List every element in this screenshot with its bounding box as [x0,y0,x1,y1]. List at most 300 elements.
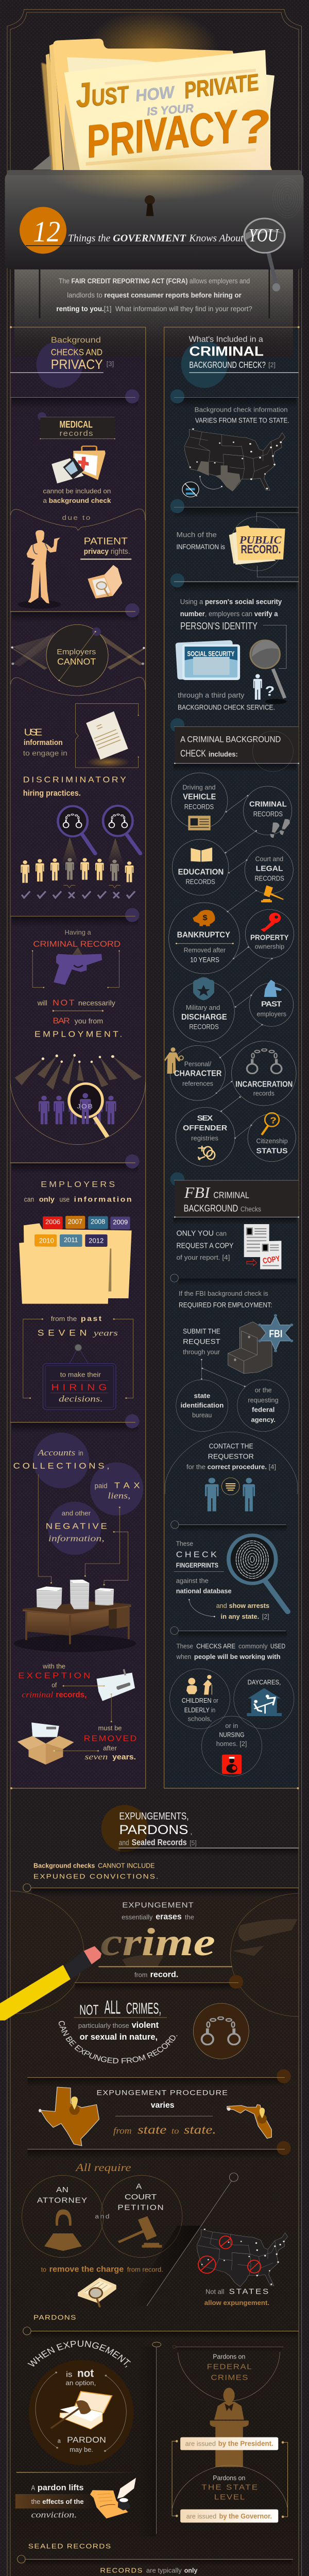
text: patient privacy rights: PATIENT [84,536,128,547]
text: will not necessarily bar you from employment: necessarily [78,999,115,1007]
icon: medical bag and x-ray [52,446,106,483]
text: with the exception of criminal records [18,1663,90,1699]
text: background checks cannot include expunged convictions: Background checks [33,1862,95,1870]
text: not all states allow expungement: Not all [205,2289,224,2296]
bubble: bankruptcy: $ [202,914,208,922]
text: show arrests in any state [188,1599,269,1621]
bubble: or in nursing homes: NURSING [219,1732,244,1739]
sub-heading: a criminal background check includes: A CRIMINAL BACKGROUND [180,735,281,744]
bubble: an attorney: ATTORNEY [37,2197,88,2205]
text: employers can only use information: use [60,1196,70,1204]
heading: expungements, pardons and sealed records: , [190,1828,193,1836]
keyhole [145,195,155,216]
year tabs 2006 to 2012: 2008 [91,1218,105,1226]
bubble: requesting federal agency: agency. [251,1416,276,1424]
text: not all crimes can be expunged from record: ALL [105,1997,121,2018]
callout: employers cannot: CANNOT [57,656,96,667]
icon: report copy: COPY [262,1255,281,1265]
text: from the past seven years [23,1315,133,1399]
people silhouettes [39,1096,116,1124]
vertical divider [138,2342,161,2536]
bubble: criminal records: CRIMINAL [249,801,287,808]
icon: magnifier and small person [250,640,287,704]
sign: hiring decisions: to make their [60,1371,101,1379]
divider two [10,603,140,622]
bubble: bankruptcy: 10 YEARS [190,956,219,964]
heading: sealed records: SEALED RECORDS [28,2543,111,2550]
text: records are typically only sealed for juveniles: only [184,2567,197,2574]
label: issued by the governor: are issued [186,2513,216,2520]
text: a pardon lifts the effects of the conviction [15,2482,94,2519]
divider four [10,1155,140,1174]
bubble: bankruptcy [169,903,239,974]
divider [170,1626,287,1638]
text: social security number verifies identity: number, employers can verify a [180,610,278,618]
magnifying glass: you [244,218,285,292]
bubble: education records: RECORDS [185,878,215,886]
text: not all states allow expungement: allow expungement. [204,2299,269,2307]
text: with the exception of criminal records: with the [42,1663,65,1670]
callout: employers cannot [46,624,108,686]
text: must be removed after seven years: after [103,1744,117,1752]
state level pardons: THE STATE [201,2483,258,2492]
label: issued by the governor [180,2510,278,2522]
state level pardons: Pardons on [213,2475,245,2482]
left column background [10,327,146,1788]
bubble: daycares: DAYCARES, [248,1679,281,1686]
text: show arrests in any state: [2] [262,1613,269,1620]
smudge marks [122,1919,298,1967]
text: social security number verifies identity: Using a person's social security [180,598,282,606]
bubble: children or elderly in schools: CHILDREN or [182,1697,218,1705]
sub-heading: a criminal background check includes: includes: [209,750,238,758]
text: not all crimes can be expunged from record: CRIMES, [126,1999,161,2017]
text: employers can only use information: only [39,1196,55,1204]
bubble: bankruptcy: Removed after [184,947,226,954]
icon: book and gavel [51,2392,112,2429]
heading: expungements, pardons and sealed records: PARDONS [119,1822,188,1837]
text: expungement essentially erases the crime from record: record. [150,1969,178,1979]
text: to remove the charge from record [41,2264,163,2274]
text: through a third party background check service: BACKGROUND CHECK SERVICE. [178,704,275,711]
divider [170,1274,297,1285]
bubble: military and discharge records: Military and [186,1004,220,1012]
icon: public record folder: PUBLIC [239,534,282,546]
spotlights [15,1054,142,1090]
diagonal divider with map [128,2173,288,2306]
year tabs 2006 to 2012: 2010 [39,1238,54,1245]
text: if required for employment: If the FBI background check is [179,1290,268,1298]
banner: due to: due to [62,514,90,522]
text: where checks are used: CHECKS ARE [196,1642,235,1650]
icon: pencil eraser [0,1946,101,2021]
medical records label [38,412,115,439]
bubble: citizenship status: ? [270,1115,277,1126]
bubble: sex offender registries: SEX [197,1114,213,1123]
text: must be removed after seven years [84,1725,136,1761]
glow behind folder [85,10,219,88]
podium area: pardons on federal crimes [172,2345,288,2522]
text: expungement procedure varies from state to state: state. [184,2123,216,2137]
text: with the exception of criminal records: EXCEPTION [18,1670,90,1680]
divider one [10,389,140,408]
text: all require: All require [75,2161,131,2174]
text: from the past seven years: past [81,1315,101,1323]
bubble: state identification bureau: identification [181,1402,224,1410]
text: use information to engage in: information [24,739,63,747]
text: not all crimes can be expunged from record: particularly those [78,2022,129,2030]
text: and: and [95,2213,109,2220]
icon: cardboard box [18,1722,99,1765]
bubble: requesting federal agency: requesting [248,1397,279,1404]
bubble: citizenship status [248,1113,296,1162]
magnifier on job candidate: JOB [77,1103,93,1110]
bubble: or in nursing homes: homes. [2] [216,1740,247,1748]
text: a pardon lifts the effects of the conviction: effects of the [42,2498,84,2506]
bubble: bankruptcy: BANKRUPTCY [177,930,230,939]
bubble: sex offender registries: registries [191,1134,218,1142]
bubble: character references: Personal/ [184,1060,211,1068]
text: patient privacy rights: privacy rights. [84,548,130,556]
bubble: driving and vehicle records: Driving and [182,784,216,791]
text: submit the request through your: REQUEST [183,1337,220,1346]
arc: contact the requestor: CONTACT THE [209,1443,253,1450]
text: having a criminal record [33,929,121,948]
bubble: a court petition: PETITION [117,2204,164,2212]
text: expungement procedure varies from state to state: varies [151,2100,175,2110]
text: show arrests in any state: in any state. [221,1613,259,1621]
intro panel side bars [39,269,270,318]
text: with the exception of criminal records: records, [56,1690,87,1699]
bubble: children or elderly in schools: schools, [188,1716,212,1722]
magnifying glass: you: YOU [249,225,280,246]
heading: expungements, pardons and sealed records: and [119,1839,129,1847]
text: with the exception of criminal records: criminal [22,1690,54,1699]
text: expungement essentially erases the crime from record: essentially [122,1914,153,1921]
text: much of the information [176,531,225,551]
text: must be removed after seven years: must be [98,1725,122,1732]
text: and other negative information [46,1510,107,1544]
icon: public record folder [229,513,299,577]
sign: hiring decisions: HIRING [51,1382,107,1393]
text: paid tax liens: liens, [108,1490,130,1501]
heading: background checks and privacy: Background [51,336,101,345]
text: expungement essentially erases the crime from record: the [185,1914,194,1921]
bubble: or in nursing homes: or in [225,1722,238,1730]
medical records label: MEDICAL [60,419,93,430]
bubble: property ownership [245,909,294,958]
illustration: doctor silhouette [18,530,61,609]
drawer divider line [26,245,247,246]
text: where checks are used: USED [270,1642,285,1650]
text: having a criminal record: Having a [65,929,91,937]
map: Texas [39,2087,99,2146]
divider [18,2555,293,2566]
arc: contact the requestor: REQUESTOR [208,1453,254,1461]
bubble: sex offender registries: OFFENDER [183,1124,228,1132]
text: use information to engage in: to engage in [23,750,67,757]
sub-heading: a criminal background check includes [170,718,299,772]
bubble: requesting federal agency: or the [255,1387,272,1394]
drawer front [5,144,304,269]
icon: filing cabinet and FBI star badge: FBI [269,1328,282,1340]
bubble: character references: references [182,1080,213,1088]
text: records are typically only sealed for juveniles [100,2567,197,2576]
text: accounts in collections: in [78,1449,83,1458]
icon: filing cabinet and FBI star badge [228,1314,293,1374]
sign: hiring decisions: decisions. [59,1394,103,1403]
bubble: education records [172,839,229,895]
state level pardons [172,2465,287,2522]
drawer subtitle: Knows About [188,232,244,244]
text: will not necessarily bar you from employment: will [37,999,47,1007]
drawer subtitle: GOVERNMENT [113,232,186,244]
heading: FBI criminal background checks: FBI [184,1184,211,1201]
text: accounts in collections: COLLECTIONS, [13,1461,109,1470]
text: accounts in collections: Accounts [37,1448,75,1458]
divider [170,499,299,518]
bubble: education records: EDUCATION [178,868,224,876]
illustration: folder with year tabs [19,1216,132,1304]
illustration: spotlights on job candidates [10,1054,145,1145]
text: much of the information: INFORMATION is [176,543,225,551]
text: not all crimes can be expunged from record: or sexual in nature, [80,2032,158,2042]
text: expungement procedure varies from state to state: from [113,2126,132,2136]
text and circle: when expungement is not an option: is [66,2370,73,2379]
text: background checks cannot include expunged convictions: CANNOT INCLUDE [98,1862,154,1870]
text: a pardon lifts the effects of the conviction: A [31,2484,36,2492]
text and circle: when expungement is not an option: PARDON [67,2436,106,2445]
bubble: state identification bureau [176,1359,246,1432]
bubble: court and legal records: Court and [255,856,283,863]
bubble: a court petition [101,2175,182,2258]
expungement section background [10,1788,299,2576]
text: not all crimes can be expunged from record: violent [132,2020,159,2030]
bubble: sex offender registries [176,1107,235,1166]
bubble: a court petition: COURT [125,2193,157,2201]
bubble: past employers [249,980,294,1026]
divider [27,2069,291,2087]
text: not all crimes can be expunged from record: NOT [79,2003,98,2018]
bubble: children or elderly in schools [169,1669,230,1729]
text: will not necessarily bar you from employment [35,999,122,1039]
text: background checks cannot include expunged convictions [33,1862,158,1880]
text: submit the request through your [183,1327,220,1356]
text: expungement procedure varies from state to state [96,2089,228,2137]
text: these check fingerprints: These [176,1540,193,1548]
text: paid tax liens: TAX [114,1480,140,1490]
bubble: citizenship status: Citizenship [256,1138,288,1145]
connector lines between bubbles [216,795,273,1139]
bubble: court and legal records: LEGAL [256,865,283,873]
bubble: an attorney: AN [56,2186,68,2194]
heading: FBI criminal background checks [170,1172,299,1225]
icon: scroll, quill and ink [90,2478,136,2518]
text: submit the request through your: SUBMIT THE [183,1327,220,1335]
year tabs 2006 to 2012: 2011 [64,1236,78,1244]
heading: background checks and privacy: CHECKS AND [51,347,102,358]
year tabs 2006 to 2012 [35,1216,130,1247]
bubble: state identification bureau: bureau [192,1412,212,1419]
text: varies from state to state: Background check information [195,406,288,414]
banner: due to [11,509,145,530]
bubble: military and discharge records: RECORDS [189,1023,219,1031]
text: must be removed after seven years: REMOVED [84,1734,136,1743]
callout: employers cannot: Employers [57,648,96,656]
bubble: court and legal records [245,846,293,902]
candidate row [21,858,133,883]
text: will not necessarily bar you from employment: NOT [53,999,75,1007]
folder back layers [32,44,63,172]
folder [53,39,272,170]
text: submit the request through your: through your [183,1348,220,1356]
icon: social security card: SOCIAL SECURITY [187,650,234,658]
paper stacks [37,1580,114,1609]
text: social security number verifies identity: PERSON'S IDENTITY [180,621,258,632]
bubble cluster: collections, tax liens, negative information [13,1433,143,1555]
text and circle: when expungement is not an option [27,2340,134,2465]
text: these check fingerprints: FINGERPRINTS [176,1562,218,1569]
bubble: driving and vehicle records [171,773,228,831]
sign: hiring decisions [43,1344,116,1410]
sub-heading: a criminal background check includes: CHECK [180,749,206,759]
text: to remove the charge from record: to [41,2266,46,2274]
text and circle: when expungement is not an option: not [77,2367,94,2379]
map: states without expungement [197,2228,288,2286]
text: through a third party background check service [178,691,275,711]
text: show arrests in any state: and [216,1602,227,1610]
text: paid tax liens: paid [95,1482,108,1490]
heading: criminal background check: [2] [268,362,276,368]
text: employers can only use information [24,1180,132,1204]
drawer subtitle [68,232,244,244]
icon: magnifier with fingerprint [229,1535,288,1612]
bubble: military and discharge records [174,977,234,1042]
text: cannot be included on a background check: cannot be included on [43,487,111,495]
illustration: desk with paper stacks [14,1580,136,1652]
text: varies from state to state [195,406,289,425]
bubble: character references [165,1045,225,1100]
icon: handgun in frame [32,947,120,988]
state level pardons: LEVEL [214,2494,245,2501]
text: will not necessarily bar you from employment: you from [75,1018,103,1025]
heading: expungements, pardons and sealed records: [5] [190,1840,197,1847]
text: where checks are used: commonly [238,1642,268,1650]
text: expungement procedure varies from state to state: to [171,2126,179,2136]
bubble: property ownership: PROPERTY [250,934,289,942]
text: where checks are used [176,1642,285,1661]
text: if required for employment: REQUIRED FOR EMPLOYMENT: [179,1301,272,1309]
text: through a third party background check service: through a third party [178,691,245,700]
year tabs 2006 to 2012: 2006 [45,1218,60,1226]
year tabs 2006 to 2012: 2012 [89,1238,104,1245]
text: expungement essentially erases the crime from record: from [134,1971,147,1979]
illustration: president at podium [210,2388,249,2467]
heading: pardons: PARDONS [33,2314,76,2321]
paper sheets [64,50,274,170]
text: where checks are used: people will be working with [194,1653,281,1661]
title word: is your: IS YOUR [146,103,195,118]
map: Florida [227,2105,271,2139]
text: discriminatory hiring practices: DISCRIMINATORY [23,775,126,784]
text: social security number verifies identity [180,598,286,668]
decorative corner arcs [10,1891,299,2016]
number twelve badge: 12 [33,216,60,248]
bubble: children or elderly in schools: ELDERLY in [184,1706,215,1714]
number twelve badge [20,207,66,253]
divider three [10,908,140,927]
bubble: daycares [234,1669,294,1729]
text: records are typically only sealed for juveniles: are typically [146,2567,182,2574]
text: from the past seven years: from the [51,1315,77,1323]
text: from the past seven years: SEVEN [38,1328,87,1337]
folder with title [32,39,274,172]
intro text: The FAIR CREDIT REPORTING ACT (FCRA) allows employers and [59,277,250,285]
intro text: landlords to request consumer reports before hiring or [67,291,242,299]
bubble: past employers: PAST [261,1000,282,1008]
divider [171,1521,287,1532]
text: not all states allow expungement: STATES [229,2287,268,2296]
text and circle: when expungement is not an option: may be. [70,2446,93,2454]
spotlight beams [11,632,145,670]
text: use information to engage in [23,727,67,757]
icon: public record folder: RECORD. [241,543,281,556]
text: a pardon lifts the effects of the conviction: pardon lifts [38,2482,84,2492]
text: where checks are used: These [176,1642,193,1650]
text: must be removed after seven years: years. [112,1753,136,1761]
text: employers can only use information: information [74,1196,132,1204]
intro text [56,277,252,313]
text: with the exception of criminal records: of [52,1682,57,1689]
bubble: court and legal records: RECORDS [254,874,284,883]
intro panel background [14,269,293,357]
text: pardons on federal crimes [207,2353,252,2382]
text: these check fingerprints [174,1540,232,1595]
label: issued by the governor: by the Governor. [219,2512,272,2520]
text: only you can request a copy: REQUEST A COPY [176,1242,234,1250]
magnifier with handcuffs [103,806,140,854]
icon: document in frame [76,704,139,768]
panel: background checks and privacy [10,336,145,1765]
heading: expungements, pardons and sealed records: EXPUNGEMENTS, [119,1811,189,1822]
divider [75,1975,243,1992]
text: accounts in collections [13,1448,109,1470]
banner curve [11,677,145,696]
icon: two people with speech bubble [165,1478,298,1512]
text: having a criminal record: CRIMINAL RECORD [33,940,121,948]
heading: background checks and privacy [10,336,114,388]
bubble: property ownership: ownership [255,943,284,951]
text: pardons on federal crimes: FEDERAL [207,2363,252,2371]
text: not all crimes can be expunged from record: CAN BE EXPUNGED FROM RECORD. [59,2021,177,2064]
heading: criminal background check [181,335,299,388]
drawer subtitle: Things the [68,232,111,244]
bubble: driving and vehicle records: RECORDS [184,803,214,811]
bubble: requesting federal agency [237,1380,289,1432]
bubble: an attorney [22,2175,104,2258]
heading: expungements, pardons and sealed records: Sealed Records [132,1838,187,1847]
intro text: renting to you.[1] What information will they find in your report? [56,305,252,313]
title [73,69,274,167]
bubble: past employers: employers [257,1010,286,1018]
icon: report copy [244,1224,281,1269]
text: will not necessarily bar you from employment: EMPLOYMENT. [35,1030,122,1039]
divider [23,1884,299,1897]
text: background checks cannot include expunged convictions: EXPUNGED CONVICTIONS. [33,1873,158,1880]
text: these check fingerprints: CHECK [176,1551,217,1559]
text: these check fingerprints: against the [176,1577,209,1585]
text and circle: when expungement is not an option: an option, [65,2379,96,2387]
